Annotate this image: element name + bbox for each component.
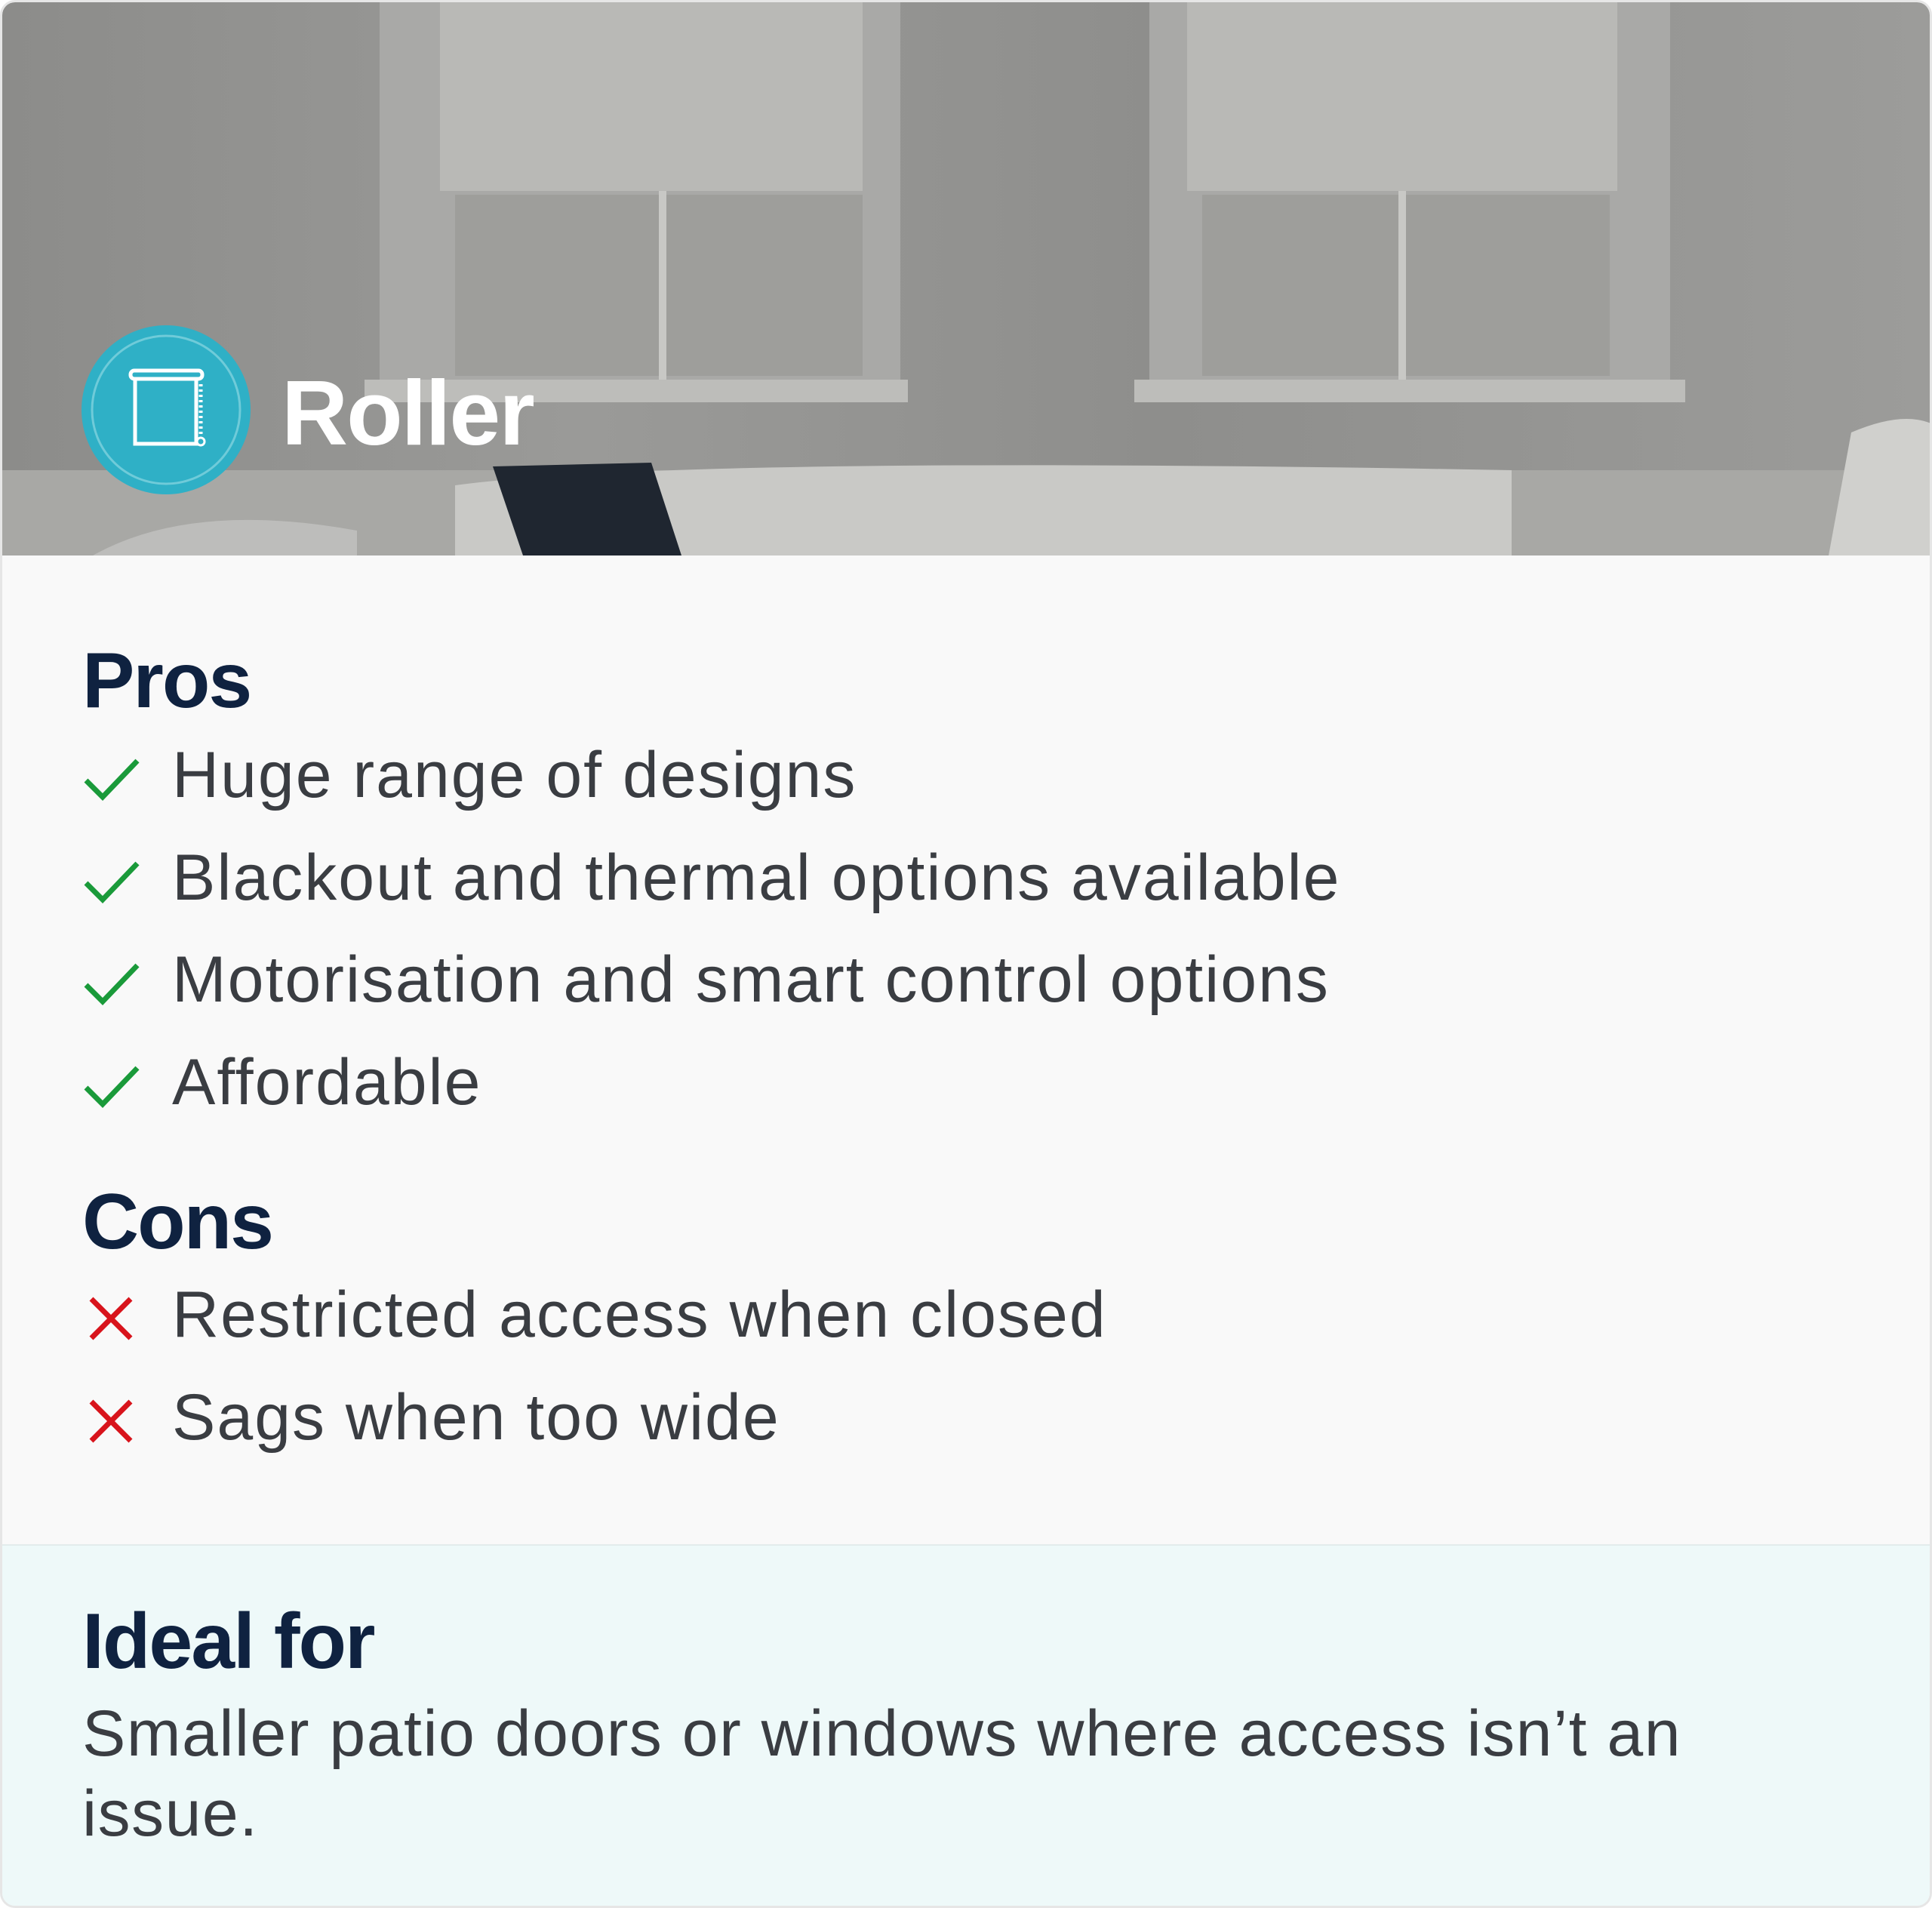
panel: ideal for [2, 1544, 1932, 1908]
heading: Ideal for: Ideal for [82, 1598, 374, 1685]
ideal text [82, 1697, 1681, 1850]
icon: roller blind [82, 325, 251, 494]
pro item: Blackout and thermal options available [172, 842, 1340, 914]
ideal text: issue. [82, 1777, 259, 1850]
cons list [89, 1279, 1107, 1454]
pro item: Huge range of designs [172, 739, 857, 811]
header photo [2, 2, 1932, 555]
heading: Cons: Cons [82, 1178, 272, 1266]
ideal text: Smaller patio doors or windows where access isn’t an [82, 1697, 1681, 1770]
con item: Restricted access when closed [172, 1279, 1107, 1351]
pros list [85, 739, 1340, 1119]
con item: Sags when too wide [172, 1381, 780, 1454]
pro item: Affordable [172, 1046, 481, 1119]
pro item: Motorisation and smart control options [172, 943, 1330, 1016]
title: Roller [281, 362, 534, 464]
heading: Pros: Pros [82, 637, 251, 725]
